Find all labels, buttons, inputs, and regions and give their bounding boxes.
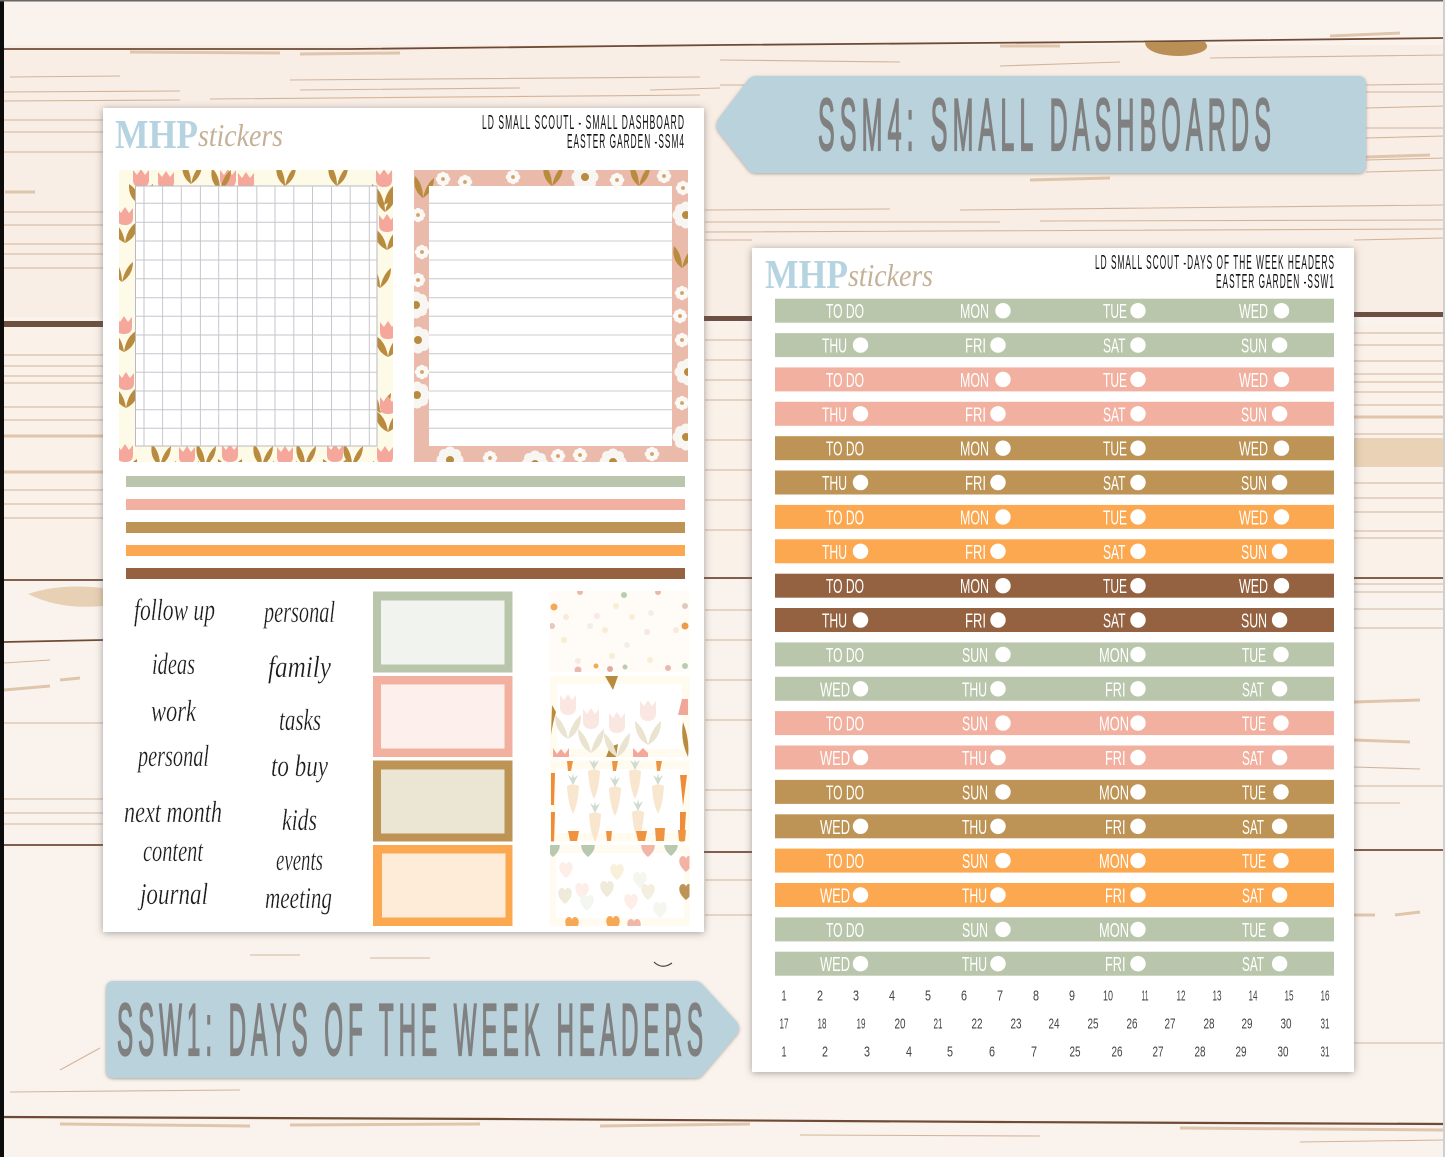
date numbers row 3: 30 bbox=[1278, 1044, 1288, 1060]
sage strip 1: MON bbox=[960, 300, 989, 323]
gold strip 4: SAT bbox=[1242, 816, 1264, 839]
sage strip 2: SUN bbox=[1241, 335, 1267, 358]
date numbers row 2: 23 bbox=[1010, 1016, 1022, 1032]
script words right column: personal bbox=[263, 594, 335, 629]
sage strip 5: TO DO bbox=[826, 919, 864, 942]
date numbers row 1: 11 bbox=[1142, 988, 1148, 1004]
date numbers row 2: 22 bbox=[972, 1016, 982, 1032]
date numbers row 3: 4 bbox=[906, 1044, 912, 1060]
sage strip 4: THU bbox=[962, 678, 987, 701]
date numbers row 1: 14 bbox=[1248, 988, 1258, 1004]
gold strip 1: MON bbox=[960, 438, 989, 461]
pink strip 1: TUE bbox=[1103, 369, 1127, 392]
text: LD SMALL SCOUTL - SMALL DASHBOARD bbox=[482, 112, 685, 134]
orange strip 3: SUN bbox=[962, 850, 988, 873]
gold strip 3 bbox=[775, 780, 1334, 804]
sage strip 6: WED bbox=[820, 953, 850, 976]
patterned label: tulips bbox=[550, 676, 690, 757]
brown strip 2: SAT bbox=[1103, 610, 1126, 632]
sage strip 4: FRI bbox=[1105, 678, 1126, 701]
pink strip 2 bbox=[775, 402, 1334, 426]
orange strip 2: SAT bbox=[1103, 541, 1126, 564]
script words right column: family bbox=[268, 649, 331, 684]
orange strip 1: TO DO bbox=[826, 506, 864, 529]
pink strip 4: SAT bbox=[1242, 747, 1264, 770]
sage strip 1: WED bbox=[1239, 300, 1268, 323]
orange strip 3: MON bbox=[1099, 850, 1129, 873]
pink strip 2: SUN bbox=[1241, 403, 1267, 426]
date numbers row 2: 25 bbox=[1088, 1016, 1098, 1032]
date numbers row 3: 3 bbox=[864, 1044, 870, 1060]
date numbers row 1: 3 bbox=[853, 988, 859, 1004]
date numbers row 1: 15 bbox=[1284, 988, 1294, 1004]
date numbers row 1: 12 bbox=[1176, 988, 1186, 1004]
gold strip 4: WED bbox=[820, 816, 850, 839]
orange strip 4 bbox=[775, 883, 1334, 908]
date numbers row 3: 29 bbox=[1236, 1044, 1246, 1060]
sage strip 5 bbox=[775, 917, 1334, 942]
gold strip 3: MON bbox=[1099, 781, 1129, 804]
patterned label: dots bbox=[549, 589, 690, 674]
sage strip 1: TUE bbox=[1103, 300, 1127, 323]
sheet title bbox=[1095, 252, 1335, 293]
sage strip 5: TUE bbox=[1242, 919, 1266, 942]
date numbers row 1: 8 bbox=[1033, 988, 1039, 1004]
brown strip 2 bbox=[775, 608, 1334, 632]
date numbers row 3 bbox=[782, 1044, 1330, 1060]
logo: MHP stickers: MHP bbox=[115, 111, 198, 157]
sage strip 6 bbox=[775, 952, 1334, 976]
sheet: SSM4 small dashboard bbox=[103, 108, 704, 935]
script words left column: content bbox=[143, 833, 204, 868]
pink strip 3: TUE bbox=[1242, 713, 1266, 736]
sage strip 6: SAT bbox=[1242, 953, 1264, 976]
sage strip 2: FRI bbox=[965, 335, 986, 358]
date numbers row 3: 27 bbox=[1152, 1044, 1164, 1060]
orange strip 4: THU bbox=[962, 884, 987, 908]
sage strip 3: MON bbox=[1099, 644, 1129, 667]
lined writing area bbox=[429, 186, 672, 446]
orange strip 4: FRI bbox=[1105, 884, 1126, 908]
gold strip 4: THU bbox=[962, 816, 987, 839]
sage strip 2: SAT bbox=[1103, 335, 1126, 358]
orange strip 3 bbox=[775, 849, 1334, 873]
date numbers row 2: 30 bbox=[1280, 1016, 1292, 1032]
orange strip 2: THU bbox=[822, 541, 847, 564]
gold strip 2: SUN bbox=[1241, 472, 1267, 495]
logo: MHP stickers: stickers bbox=[848, 257, 933, 293]
orange strip 3: TUE bbox=[1242, 850, 1266, 873]
sage strip 5: SUN bbox=[962, 919, 988, 942]
pink strip 2: FRI bbox=[965, 403, 986, 426]
gold strip 2 bbox=[775, 470, 1334, 495]
date numbers row 3: 31 bbox=[1320, 1044, 1330, 1060]
date numbers row 3: 5 bbox=[947, 1044, 953, 1060]
date numbers row 2 bbox=[780, 1016, 1330, 1032]
sage strip 2: THU bbox=[822, 335, 847, 358]
gold strip 4 bbox=[775, 814, 1334, 839]
date numbers row 2: 18 bbox=[818, 1016, 826, 1032]
script words left column: journal bbox=[137, 876, 208, 911]
pink strip 4: THU bbox=[962, 747, 987, 770]
logo: MHP stickers: MHP bbox=[765, 251, 848, 297]
sage strip 6: THU bbox=[962, 953, 987, 976]
orange strip 1: WED bbox=[1239, 506, 1268, 529]
date numbers row 1: 7 bbox=[997, 988, 1003, 1004]
script words left column: personal bbox=[137, 738, 209, 773]
text: EASTER GARDEN -SSM4 bbox=[567, 131, 685, 153]
sage strip 3 bbox=[775, 642, 1334, 667]
date numbers row 1: 6 bbox=[961, 988, 967, 1004]
sage strip 5: MON bbox=[1099, 919, 1129, 942]
date numbers row 2: 17 bbox=[780, 1016, 788, 1032]
gold strip 2: SAT bbox=[1103, 472, 1126, 495]
script words left column: work bbox=[151, 693, 197, 728]
date numbers row 1: 9 bbox=[1069, 988, 1075, 1004]
gold strip 3: TO DO bbox=[826, 781, 864, 804]
logo: MHP stickers: stickers bbox=[198, 117, 283, 153]
date numbers row 2: 28 bbox=[1204, 1016, 1214, 1032]
sage strip 1: TO DO bbox=[826, 300, 864, 323]
date numbers row 3: 2 bbox=[822, 1044, 828, 1060]
sage strip 4: SAT bbox=[1242, 678, 1264, 701]
orange strip 2: FRI bbox=[965, 541, 986, 564]
date numbers row 1 bbox=[782, 988, 1330, 1004]
date numbers row 2: 19 bbox=[856, 1016, 866, 1032]
date numbers row 3: 6 bbox=[989, 1044, 995, 1060]
orange strip 2: SUN bbox=[1241, 541, 1267, 564]
pink strip 3: TO DO bbox=[826, 713, 864, 736]
date numbers row 2: 26 bbox=[1126, 1016, 1138, 1032]
gold strip 1: TUE bbox=[1103, 438, 1127, 461]
colour stripes bbox=[126, 476, 685, 579]
pink strip 4 bbox=[775, 746, 1334, 770]
patterned label: carrots bbox=[550, 758, 690, 842]
gold strip 2: FRI bbox=[965, 472, 986, 495]
date numbers row 3: 28 bbox=[1194, 1044, 1206, 1060]
date numbers row 2: 24 bbox=[1048, 1016, 1060, 1032]
gold strip 1: TO DO bbox=[826, 438, 864, 461]
pink strip 3: SUN bbox=[962, 713, 988, 736]
date numbers row 1: 13 bbox=[1212, 988, 1222, 1004]
gold strip 2: THU bbox=[822, 472, 847, 495]
panel: daisy border lined bbox=[414, 170, 688, 462]
logo: MHP stickers bbox=[115, 111, 283, 157]
date numbers row 3: 7 bbox=[1031, 1044, 1037, 1060]
date numbers row 2: 29 bbox=[1242, 1016, 1252, 1032]
logo: MHP stickers bbox=[765, 251, 933, 297]
brown strip 1: TUE bbox=[1103, 575, 1127, 598]
script words left column: ideas bbox=[152, 646, 195, 681]
sage strip 2 bbox=[775, 333, 1334, 358]
pink strip 2: SAT bbox=[1103, 403, 1126, 426]
script words right column: to buy bbox=[271, 748, 328, 783]
date numbers row 2: 20 bbox=[894, 1016, 906, 1032]
date numbers row 3: 1 bbox=[782, 1044, 786, 1060]
brown strip 1: TO DO bbox=[826, 575, 864, 598]
script words right column: events bbox=[276, 842, 323, 877]
brown strip 1 bbox=[775, 574, 1334, 598]
orange strip 1: MON bbox=[960, 506, 989, 529]
orange strip 1: TUE bbox=[1103, 506, 1127, 529]
pink strip 1: TO DO bbox=[826, 369, 864, 392]
brown strip 1: MON bbox=[960, 575, 989, 598]
orange strip 1 bbox=[775, 505, 1334, 529]
date numbers row 1: 4 bbox=[889, 988, 895, 1004]
script words left column bbox=[124, 592, 222, 911]
orange strip 3: TO DO bbox=[826, 850, 864, 873]
script words left column: next month bbox=[124, 794, 222, 829]
patterned label: hearts bbox=[550, 845, 690, 926]
solid frame labels bbox=[373, 592, 512, 926]
orange strip 2 bbox=[775, 539, 1334, 564]
sage strip 3: TUE bbox=[1242, 644, 1266, 667]
gold strip 1 bbox=[775, 436, 1334, 461]
grid writing area bbox=[136, 186, 377, 446]
date numbers row 2: 31 bbox=[1320, 1016, 1330, 1032]
gold strip 4: FRI bbox=[1105, 816, 1126, 839]
date numbers row 3: 26 bbox=[1112, 1044, 1122, 1060]
brown strip 2: SUN bbox=[1241, 610, 1267, 632]
pink strip 1 bbox=[775, 367, 1334, 392]
date numbers row 2: 27 bbox=[1164, 1016, 1176, 1032]
brown strip 2: FRI bbox=[965, 610, 986, 632]
gold strip 1: WED bbox=[1239, 438, 1268, 461]
script words right column: tasks bbox=[279, 702, 321, 737]
pink strip 1: MON bbox=[960, 369, 989, 392]
sage strip 1 bbox=[775, 299, 1334, 323]
script words left column: follow up bbox=[134, 592, 215, 627]
date numbers row 2: 21 bbox=[934, 1016, 942, 1032]
pink strip 3 bbox=[775, 711, 1334, 736]
date numbers row 1: 16 bbox=[1320, 988, 1330, 1004]
pink strip 1: WED bbox=[1239, 369, 1268, 392]
orange strip 4: WED bbox=[820, 884, 850, 908]
date numbers row 1: 5 bbox=[925, 988, 931, 1004]
script words right column: meeting bbox=[265, 880, 332, 915]
date numbers row 3: 25 bbox=[1070, 1044, 1080, 1060]
pink strip 2: THU bbox=[822, 403, 847, 426]
sage strip 4 bbox=[775, 677, 1334, 701]
sheet: SSW1 days of the week headers bbox=[752, 248, 1354, 1072]
banner: SSW1 days of the week headers bbox=[106, 981, 739, 1078]
panel: tulip border grid bbox=[119, 170, 393, 462]
sage strip 6: FRI bbox=[1105, 953, 1126, 976]
sheet title bbox=[482, 112, 685, 153]
sage strip 3: SUN bbox=[962, 644, 988, 667]
brown strip 1: WED bbox=[1239, 575, 1268, 598]
script words right column: kids bbox=[282, 802, 317, 837]
gold strip 3: SUN bbox=[962, 781, 988, 804]
pink strip 3: MON bbox=[1099, 713, 1129, 736]
pink strip 4: WED bbox=[820, 747, 850, 770]
date numbers row 1: 10 bbox=[1103, 988, 1113, 1004]
pink strip 4: FRI bbox=[1105, 747, 1126, 770]
sage strip 3: TO DO bbox=[826, 644, 864, 667]
script words right column bbox=[263, 594, 335, 915]
orange strip 4: SAT bbox=[1242, 884, 1264, 908]
date numbers row 1: 2 bbox=[817, 988, 823, 1004]
banner: SSM4 small dashboards bbox=[716, 76, 1366, 173]
sage strip 4: WED bbox=[820, 678, 850, 701]
header strips bbox=[775, 299, 1334, 976]
date numbers row 1: 1 bbox=[782, 988, 786, 1004]
gold strip 3: TUE bbox=[1242, 781, 1266, 804]
brown strip 2: THU bbox=[822, 610, 847, 632]
